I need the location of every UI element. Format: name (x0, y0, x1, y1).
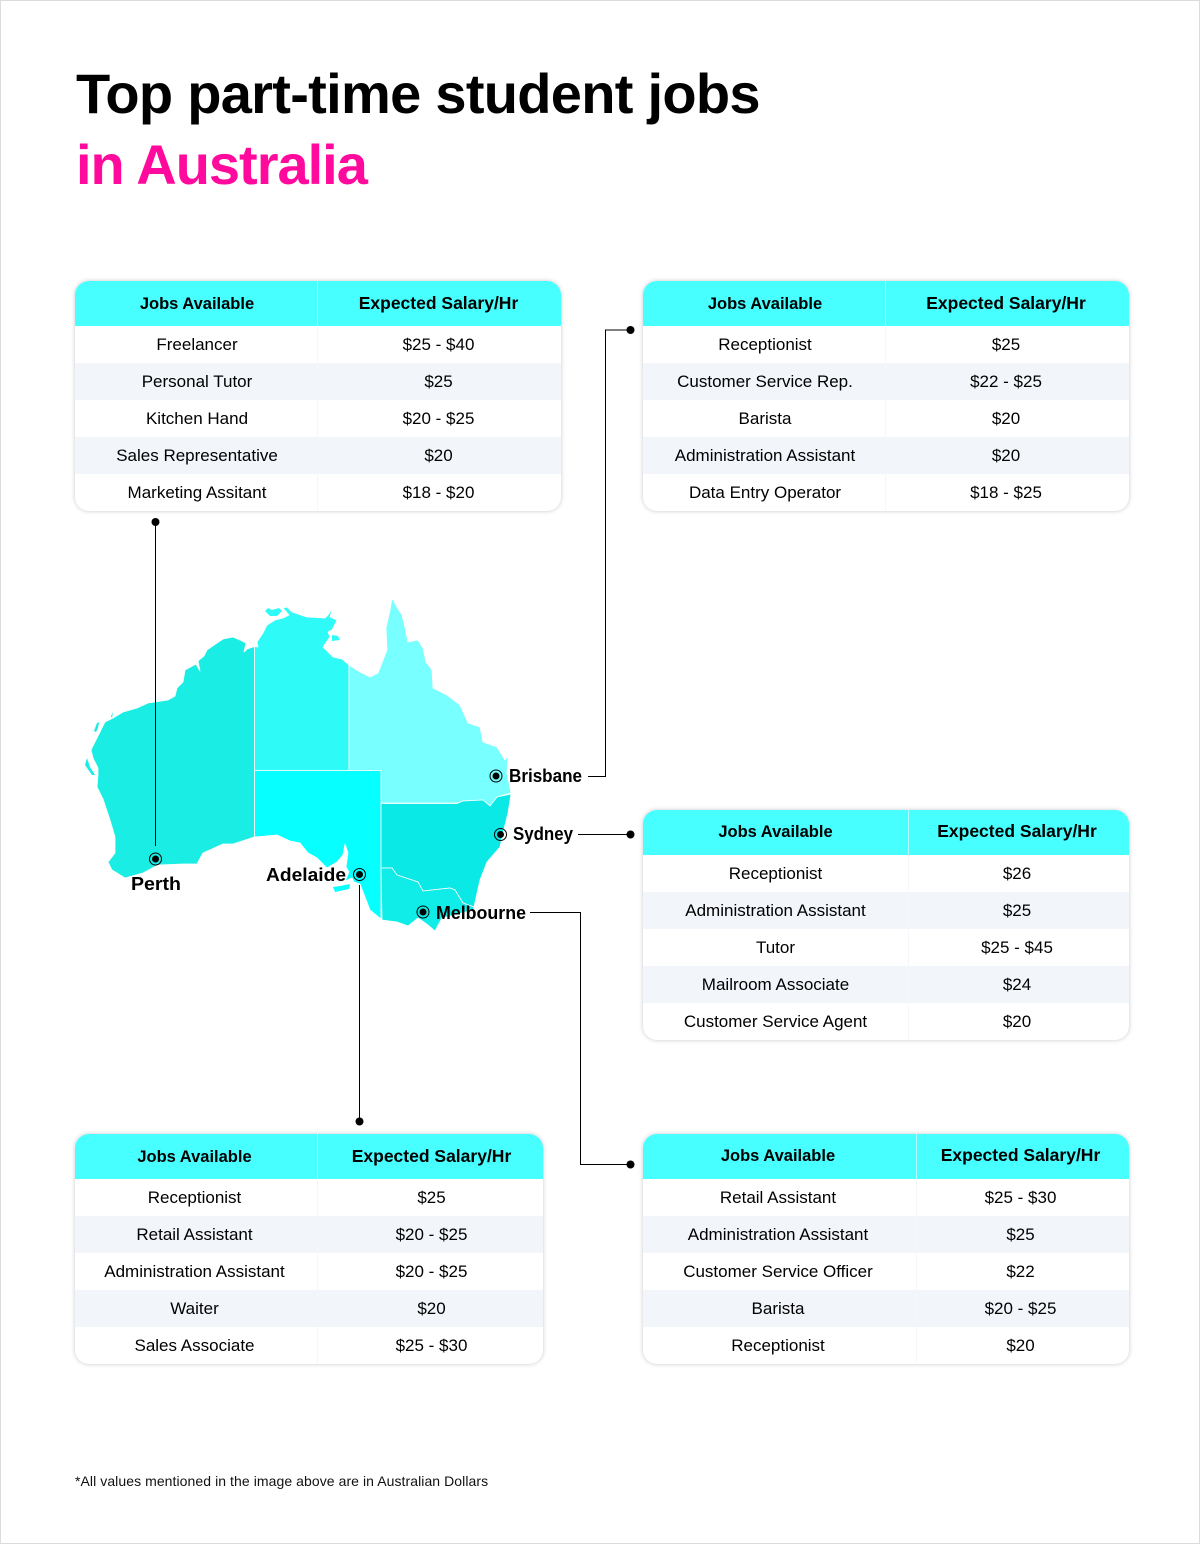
table: Perth jobs: $20 (424, 446, 453, 465)
table: Melbourne jobs: Expected Salary/Hr (941, 1145, 1100, 1165)
table: Perth jobs: $18 - $20 (403, 483, 474, 502)
islands: Tiwi and Groote Eylandt (265, 608, 340, 641)
table: Sydney jobs: $25 - $45 (981, 938, 1053, 957)
label: Brisbane: Brisbane (509, 766, 582, 786)
table: Brisbane jobs: $25 (992, 335, 1020, 354)
table: Brisbane jobs: $20 (992, 446, 1020, 465)
table: Melbourne jobs: $20 (1006, 1336, 1035, 1355)
table: Adelaide jobs: Receptionist (148, 1188, 241, 1207)
state: Western Australia (91, 637, 254, 878)
table: Melbourne jobs: Retail Assistant (720, 1188, 836, 1207)
table: Melbourne jobs: Jobs Available (721, 1147, 835, 1165)
connector: Brisbane (588, 326, 634, 776)
marker: Perth (150, 853, 162, 865)
table: Perth jobs: Personal Tutor (142, 372, 252, 391)
title: line two: in Australia (76, 133, 367, 196)
table: Melbourne jobs: Receptionist (731, 1336, 825, 1355)
table: Perth jobs: $25 - $40 (403, 335, 474, 354)
table: Brisbane jobs: Customer Service Rep. (677, 372, 853, 391)
table: Melbourne jobs (643, 1134, 1129, 1364)
table: Perth jobs (75, 281, 561, 511)
table: Brisbane jobs: Expected Salary/Hr (926, 293, 1086, 313)
map of Australia (85, 598, 511, 931)
table: Adelaide jobs: $25 (417, 1188, 446, 1207)
marker: Adelaide (354, 868, 366, 880)
marker: Brisbane (490, 770, 502, 782)
table: Adelaide jobs (75, 1134, 543, 1364)
marker: Sydney (494, 828, 506, 840)
table: Brisbane jobs: $18 - $25 (970, 483, 1042, 502)
table: Brisbane jobs: $20 (992, 409, 1020, 428)
table: Melbourne jobs: $25 (1006, 1225, 1035, 1244)
table: Sydney jobs: Receptionist (729, 864, 822, 883)
table: Perth jobs: $25 (424, 372, 453, 391)
table: Melbourne jobs: $20 - $25 (985, 1299, 1056, 1318)
table: Brisbane jobs: Barista (739, 409, 791, 428)
table: Adelaide jobs: $20 - $25 (396, 1225, 467, 1244)
table: Sydney jobs: Jobs Available (718, 823, 833, 841)
table: Brisbane jobs: Administration Assistant (675, 446, 855, 465)
table: Perth jobs: Sales Representative (116, 446, 278, 465)
label: Melbourne: Melbourne (436, 903, 526, 923)
table: Melbourne jobs: $25 - $30 (985, 1188, 1056, 1207)
state: South Australia (254, 770, 381, 919)
table: Adelaide jobs: Expected Salary/Hr (352, 1146, 511, 1166)
table: Adelaide jobs: $20 (417, 1299, 446, 1318)
table: Adelaide jobs: Waiter (170, 1299, 219, 1318)
state: Queensland (349, 598, 511, 806)
table: Sydney jobs: Administration Assistant (685, 901, 866, 920)
label: Sydney: Sydney (513, 824, 573, 844)
marker: Melbourne (417, 906, 429, 918)
table: Adelaide jobs: $20 - $25 (396, 1262, 467, 1281)
table: Melbourne jobs: $22 (1006, 1262, 1035, 1281)
islets: North West Cape and Shark Bay (85, 712, 113, 775)
table: Brisbane jobs (643, 281, 1129, 511)
table: Sydney jobs: Expected Salary/Hr (937, 821, 1097, 841)
state: New South Wales (381, 794, 511, 907)
footnote: *All values mentioned in the image above are in Australian Dollars (75, 1473, 488, 1489)
connector: Adelaide (356, 885, 364, 1126)
table: Adelaide jobs: Administration Assistant (104, 1262, 285, 1281)
table: Sydney jobs: $20 (1003, 1012, 1031, 1031)
table: Adelaide jobs: Sales Associate (134, 1336, 254, 1355)
table: Adelaide jobs: $25 - $30 (396, 1336, 467, 1355)
table: Brisbane jobs: $22 - $25 (970, 372, 1042, 391)
table: Perth jobs: Freelancer (156, 335, 238, 354)
table: Melbourne jobs: Administration Assistant (688, 1225, 868, 1244)
table: Melbourne jobs: Customer Service Officer (683, 1262, 873, 1281)
table: Perth jobs: Marketing Assitant (128, 483, 266, 502)
table: Sydney jobs: $25 (1003, 901, 1031, 920)
table: Adelaide jobs: Jobs Available (137, 1148, 252, 1166)
table: Adelaide jobs: Retail Assistant (136, 1225, 253, 1244)
table: Perth jobs: $20 - $25 (403, 409, 474, 428)
table: Melbourne jobs: Barista (752, 1299, 804, 1318)
table: Brisbane jobs: Receptionist (718, 335, 812, 354)
connector: Perth (152, 518, 160, 846)
table: Sydney jobs (643, 810, 1129, 1040)
label: Adelaide: Adelaide (266, 865, 346, 885)
table: Sydney jobs: Customer Service Agent (684, 1012, 867, 1031)
table: Brisbane jobs: Data Entry Operator (689, 483, 841, 502)
connector: Melbourne (530, 912, 634, 1168)
table: Sydney jobs: Mailroom Associate (702, 975, 849, 994)
state: Northern Territory (254, 607, 349, 770)
table: Sydney jobs: Tutor (756, 938, 795, 957)
table: Perth jobs: Jobs Available (140, 295, 254, 313)
label: Perth: Perth (131, 874, 181, 894)
table: Perth jobs: Expected Salary/Hr (359, 293, 518, 313)
table: Sydney jobs: $26 (1003, 864, 1031, 883)
title: line one: Top part-time student jobs (76, 62, 760, 125)
table: Brisbane jobs: Jobs Available (708, 295, 822, 313)
table: Perth jobs: Kitchen Hand (146, 409, 248, 428)
island: Kangaroo Island (333, 884, 350, 892)
state: Victoria (381, 868, 474, 931)
connector: Sydney (578, 830, 634, 838)
table: Sydney jobs: $24 (1003, 975, 1031, 994)
